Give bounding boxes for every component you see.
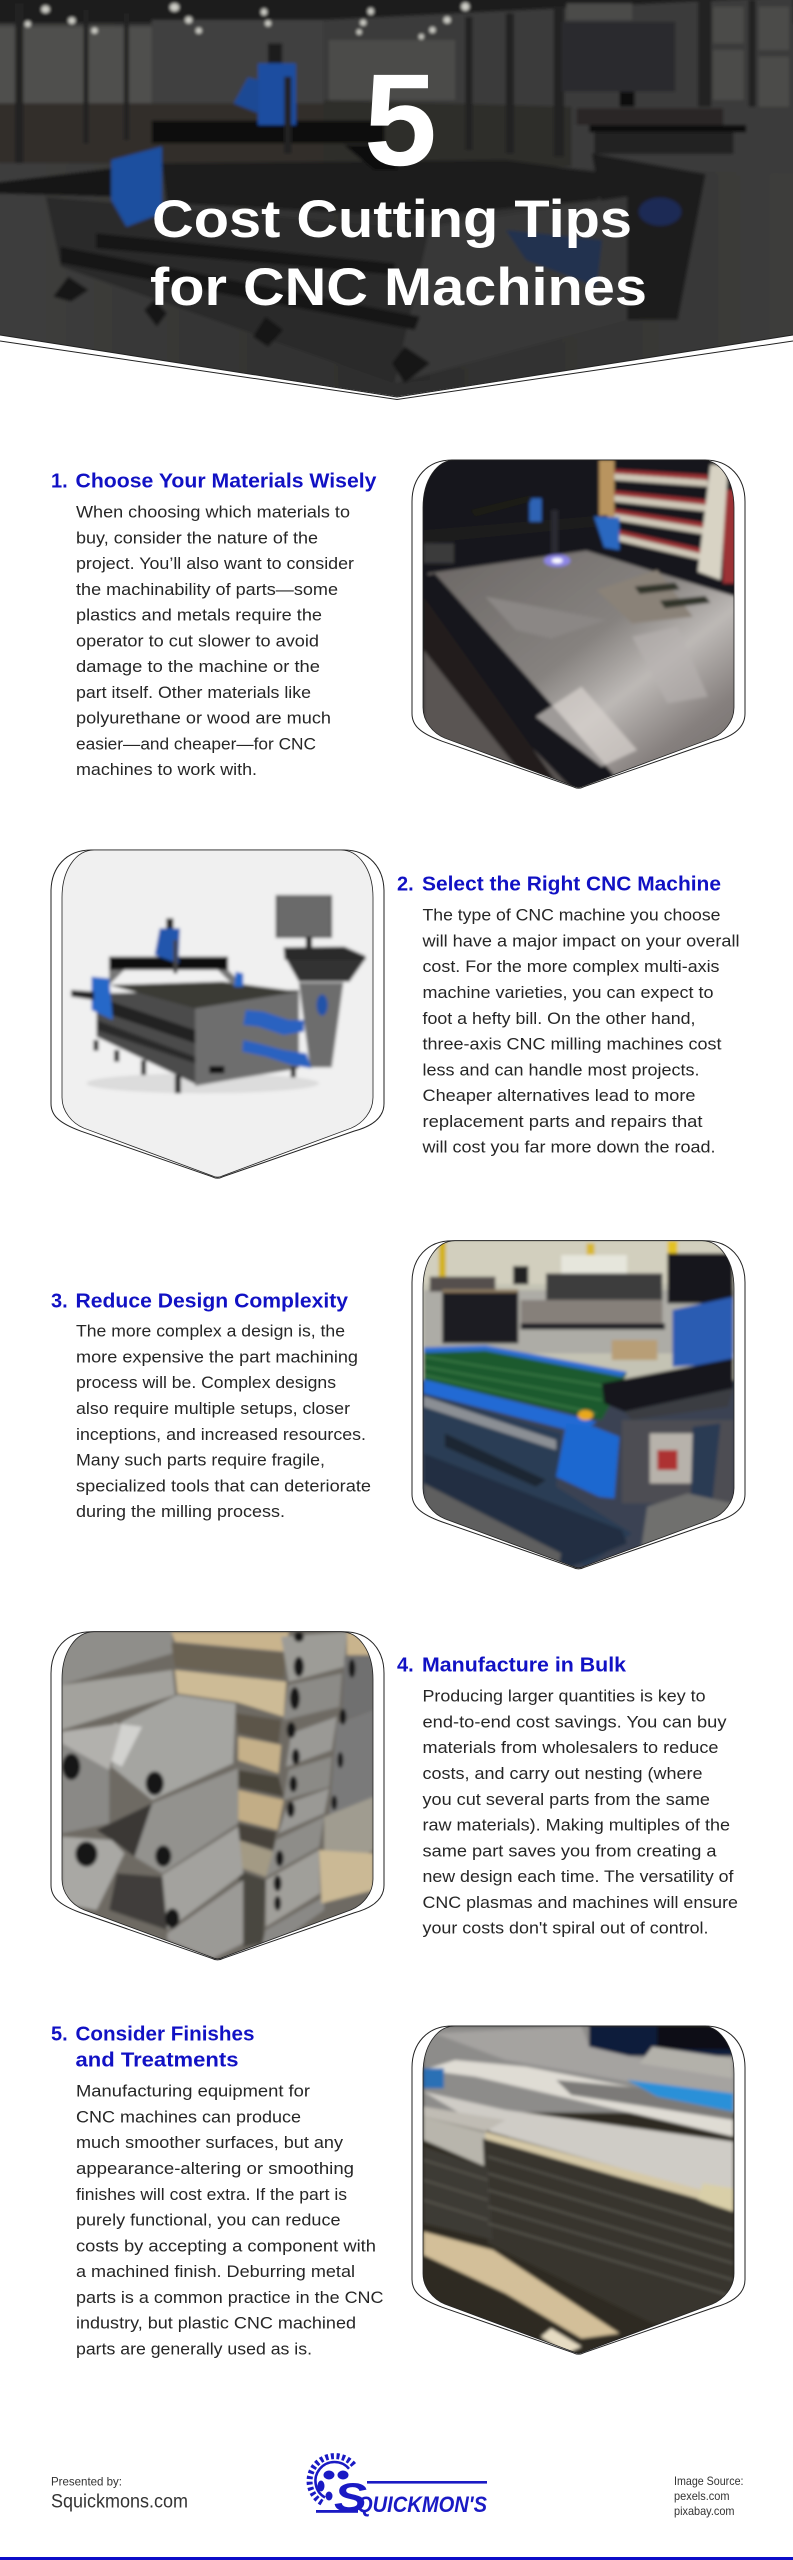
section 1 text: 1. bbox=[51, 470, 68, 492]
section 2 text: The type of CNC machine you choose bbox=[422, 906, 720, 925]
section 5 text: much smoother surfaces, but any bbox=[76, 2133, 344, 2152]
section 3 text: Reduce Design Complexity bbox=[76, 1290, 349, 1312]
section 5 text: appearance-altering or smoothing bbox=[76, 2159, 354, 2178]
section 2 text: less and can handle most projects. bbox=[422, 1060, 700, 1079]
section 1 text: operator to cut slower to avoid bbox=[76, 631, 319, 650]
header double chevron line bbox=[0, 335, 793, 400]
footer: image source: Image Source: bbox=[674, 2474, 744, 2488]
section 4 text: you cut several parts from the same bbox=[422, 1790, 710, 1809]
section 1 text: part itself. Other materials like bbox=[76, 683, 311, 702]
section 4 text: your costs don't spiral out of control. bbox=[422, 1919, 708, 1938]
section 3 text: Many such parts require fragile, bbox=[76, 1451, 325, 1470]
section 4 text: end-to-end cost savings. You can buy bbox=[422, 1712, 727, 1732]
title: for CNC Machines bbox=[150, 258, 647, 317]
section 5 text: and Treatments bbox=[76, 2050, 238, 2072]
section 5 text: industry, but plastic CNC machined bbox=[76, 2314, 356, 2333]
section 3 text: during the milling process. bbox=[76, 1502, 285, 1521]
footer: presented by: Presented by: bbox=[51, 2475, 122, 2489]
section 1 text bbox=[51, 470, 377, 779]
panel 1 photo: plasma cutter on metal sheet bbox=[404, 453, 748, 793]
section 4 text: Producing larger quantities is key to bbox=[422, 1687, 706, 1706]
footer: presented by bbox=[51, 2475, 188, 2512]
title bbox=[150, 46, 647, 317]
section 1 text: machines to work with. bbox=[76, 760, 257, 779]
section 2 text: machine varieties, you can expect to bbox=[422, 983, 714, 1002]
section 2 text: Select the Right CNC Machine bbox=[422, 874, 721, 896]
section 3 text: also require multiple setups, closer bbox=[76, 1399, 350, 1418]
section 2 text bbox=[397, 874, 740, 1157]
footer: image source: pexels.com bbox=[674, 2489, 730, 2503]
section 5 text: a machined finish. Deburring metal bbox=[76, 2262, 355, 2281]
footer: image source bbox=[674, 2474, 744, 2518]
section 5 text: finishes will cost extra. If the part is bbox=[76, 2185, 347, 2204]
footer: image source: pixabay.com bbox=[674, 2504, 734, 2518]
section 5 text: purely functional, you can reduce bbox=[76, 2211, 340, 2230]
section 2 text: replacement parts and repairs that bbox=[422, 1112, 703, 1131]
section 4 text: Manufacture in Bulk bbox=[422, 1655, 627, 1677]
section 3 text: process will be. Complex designs bbox=[76, 1373, 336, 1392]
panel 3 photo: CNC table in workshop bbox=[404, 1233, 748, 1577]
section 5 text: Manufacturing equipment for bbox=[76, 2082, 310, 2101]
section 2 text: cost. For the more complex multi-axis bbox=[422, 957, 720, 976]
section 2 text: foot a hefty bill. On the other hand, bbox=[422, 1009, 696, 1028]
section 4 text: materials from wholesalers to reduce bbox=[422, 1738, 718, 1757]
section 1 text: plastics and metals require the bbox=[76, 606, 322, 625]
section 3 text bbox=[51, 1290, 371, 1521]
section 5 text: costs by accepting a component with bbox=[76, 2236, 376, 2255]
section 5 text: 5. bbox=[51, 2024, 68, 2046]
panel 2 photo: CNC machine on light background bbox=[46, 843, 390, 1183]
section 3 text: 3. bbox=[51, 1290, 68, 1312]
section 1 text: the machinability of parts—some bbox=[76, 580, 338, 599]
section 5 text: Consider Finishes bbox=[76, 2024, 254, 2046]
section 4 text: same part saves you from creating a bbox=[422, 1841, 717, 1860]
section 2 text: will cost you far more down the road. bbox=[421, 1138, 716, 1157]
logo: Squickmon's gear mark bbox=[310, 2456, 487, 2520]
section 2 text: 2. bbox=[397, 874, 414, 896]
panel 4 photo: stacked metal parts bbox=[46, 1625, 390, 1968]
section 5 text: parts is a common practice in the CNC bbox=[76, 2288, 384, 2307]
section 1 text: easier—and cheaper—for CNC bbox=[76, 734, 316, 753]
section 4 text: CNC plasmas and machines will ensure bbox=[422, 1893, 738, 1912]
section 2 text: Cheaper alternatives lead to more bbox=[422, 1086, 696, 1105]
section 3 text: The more complex a design is, the bbox=[76, 1322, 345, 1341]
section 4 text: 4. bbox=[397, 1655, 414, 1677]
section 4 text bbox=[397, 1655, 738, 1938]
section 1 text: polyurethane or wood are much bbox=[76, 709, 331, 728]
header photo: CNC machine in warehouse bbox=[0, 0, 793, 427]
section 1 text: When choosing which materials to bbox=[76, 502, 350, 522]
section 1 text: project. You’ll also want to consider bbox=[76, 554, 354, 573]
section 4 text: costs, and carry out nesting (where bbox=[422, 1764, 702, 1783]
section 3 text: more expensive the part machining bbox=[76, 1348, 358, 1366]
section 1 text: Choose Your Materials Wisely bbox=[76, 470, 377, 492]
section 2 text: three-axis CNC milling machines cost bbox=[422, 1035, 722, 1054]
section 5 text: parts are generally used as is. bbox=[76, 2339, 312, 2358]
footer: presented by: Squickmons.com bbox=[51, 2491, 188, 2512]
section 1 text: damage to the machine or the bbox=[76, 657, 320, 676]
section 1 text: buy, consider the nature of the bbox=[76, 528, 318, 547]
panel 5 photo: stacked metal sheets bbox=[404, 2020, 748, 2360]
section 5 text: CNC machines can produce bbox=[76, 2108, 301, 2126]
section 3 text: specialized tools that can deteriorate bbox=[76, 1476, 371, 1495]
title: Cost Cutting Tips bbox=[152, 190, 632, 249]
logo: Squickmon's gear mark: QUICKMON'S bbox=[357, 2492, 487, 2517]
section 2 text: will have a major impact on your overall bbox=[421, 932, 740, 950]
bottom bar bbox=[0, 2557, 793, 2560]
section 5 text bbox=[51, 2024, 384, 2358]
section 4 text: raw materials). Making multiples of the bbox=[422, 1816, 730, 1835]
title: 5 bbox=[364, 46, 437, 193]
section 4 text: new design each time. The versatility of bbox=[422, 1867, 734, 1886]
section 3 text: inceptions, and increased resources. bbox=[76, 1425, 366, 1444]
logo: Squickmon's gear mark: S bbox=[334, 2476, 367, 2520]
